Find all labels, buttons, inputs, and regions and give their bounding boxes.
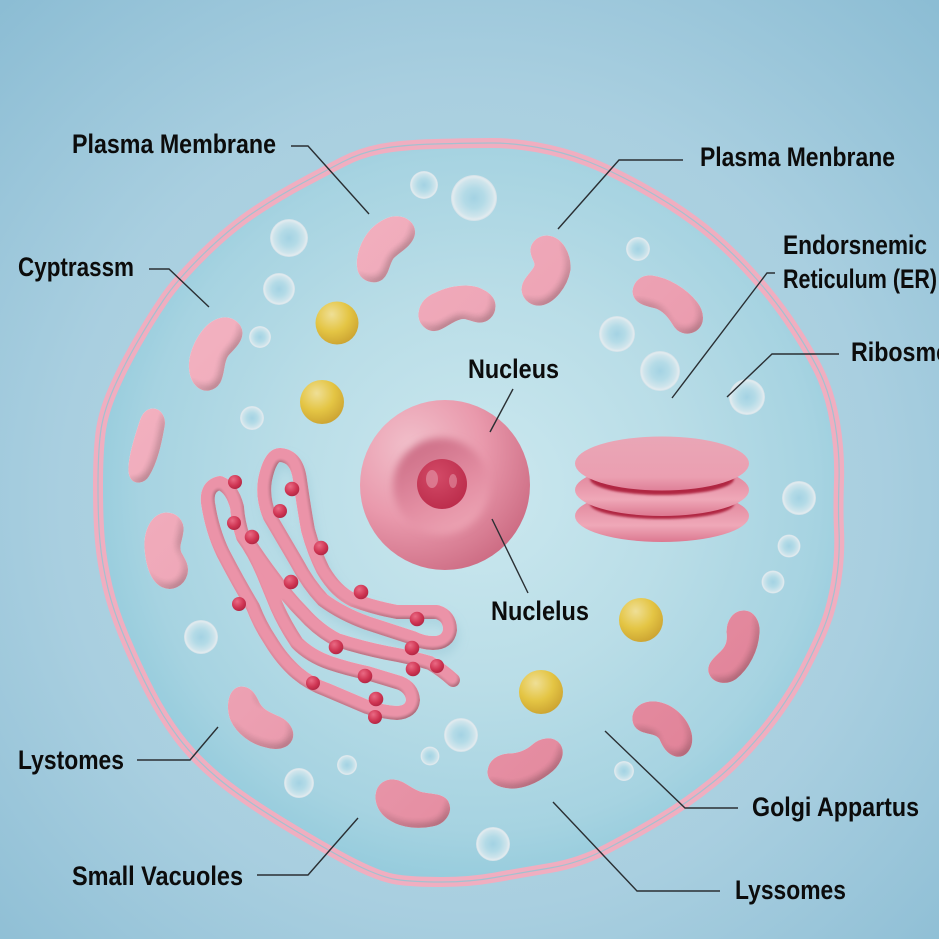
label: Golgi Appartus xyxy=(605,731,919,822)
label: Ribosme xyxy=(727,337,939,397)
label: Plasma Menbrane right xyxy=(558,142,895,229)
tube shadows xyxy=(267,462,453,650)
label: Nuclelus: Nuclelus xyxy=(491,596,589,626)
label: Nucleus xyxy=(468,354,559,432)
label: Lyssomes: Lyssomes xyxy=(735,875,846,905)
label: Small Vacuoles xyxy=(72,818,358,891)
yellow granules xyxy=(300,302,663,714)
label: Plasma Membrane left: Plasma Membrane xyxy=(72,129,276,159)
label: Lystomes: Lystomes xyxy=(18,745,124,775)
label: Cyptrassm: Cyptrassm xyxy=(18,252,134,282)
cytoplasm xyxy=(98,143,839,882)
label: Lyssomes xyxy=(553,802,846,905)
label: Nuclelus xyxy=(491,519,589,626)
label: Nucleus: Nucleus xyxy=(468,354,559,384)
nucleus xyxy=(360,400,530,570)
vesicle bubbles xyxy=(184,171,816,861)
panel: cell body xyxy=(98,143,839,882)
label: Lystomes xyxy=(18,727,218,775)
stacked discs xyxy=(575,436,749,542)
label: Endorsnemic Reticulum xyxy=(672,230,937,398)
red studs xyxy=(227,475,444,724)
ribbon tubes with studs xyxy=(208,455,453,724)
nucleolus xyxy=(417,459,467,509)
label: Plasma Membrane left xyxy=(72,129,369,214)
label: Small Vacuoles: Small Vacuoles xyxy=(72,861,243,891)
label: Plasma Menbrane right: Plasma Menbrane xyxy=(700,142,895,172)
mitochondria: kidney-shaped organelles xyxy=(130,218,758,826)
tube ribbons xyxy=(208,455,453,713)
label: Cyptrassm xyxy=(18,252,209,307)
plasma membrane outline xyxy=(98,143,839,882)
